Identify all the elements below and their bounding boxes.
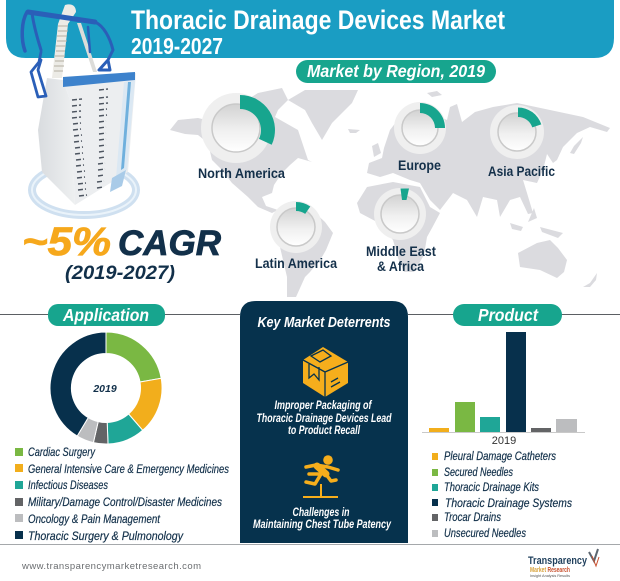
- pill: Product: Product: [478, 305, 539, 325]
- legend: product: [432, 449, 572, 540]
- text: improper packaging: [256, 400, 392, 437]
- pill: Application: Application: [62, 305, 149, 325]
- donut chart: application share: [50, 332, 162, 444]
- legend: product: Trocar Drains: [444, 510, 501, 524]
- legend: application: Oncology & Pain Management: [28, 512, 161, 526]
- label: North America: North America: [198, 166, 285, 181]
- logo: Transparency Market Research: Transparency: [528, 555, 588, 567]
- footer url: www.transparencymarketresearch.com: [21, 561, 201, 572]
- handle: [22, 12, 113, 97]
- legend: application: Military/Damage Control/Disaster Medicines: [28, 495, 222, 509]
- text: improper packaging: to Product Recall: [288, 425, 361, 437]
- legend: application: [15, 445, 229, 543]
- donut: Middle East & Africa: [374, 188, 426, 240]
- header banner: [6, 0, 614, 59]
- logo: Transparency Market Research: Insight Analysis Results: [530, 574, 570, 578]
- tube: [52, 4, 76, 78]
- logo: Transparency Market Research: Market Research: [530, 567, 570, 574]
- label: Middle East & Africa: & Africa: [377, 259, 424, 274]
- legend: product: Unsecured Needles: [444, 526, 526, 540]
- panel heading: Key Market Deterrents: [258, 315, 390, 331]
- logo: Transparency Market Research: [528, 549, 599, 578]
- pill: market by region: Market by Region, 2019: [307, 61, 485, 81]
- device illustration: drainage bag: [22, 4, 136, 215]
- CAGR callout: [22, 220, 222, 284]
- text: improper packaging: Improper Packaging of: [274, 400, 372, 412]
- label: Asia Pacific: Asia Pacific: [488, 164, 555, 179]
- donut: Latin America: [270, 201, 322, 253]
- text: improper packaging: Thoracic Drainage Devices Lead: [256, 413, 392, 425]
- text: challenges: Maintaining Chest Tube Patency: [253, 519, 391, 531]
- text: challenges: [253, 507, 391, 531]
- donut chart: application share: 2019: [92, 383, 117, 395]
- label: Europe: Europe: [398, 158, 441, 173]
- legend: application: General Intensive Care & Emergency Medicines: [28, 462, 229, 476]
- icon: package box: [303, 347, 348, 397]
- donut: Asia Pacific: [490, 105, 544, 159]
- label: Latin America: Latin America: [255, 256, 337, 271]
- icon: hurdle runner: [303, 455, 338, 497]
- bar chart: product: [422, 332, 585, 447]
- legend: application: Infectious Diseases: [28, 478, 108, 492]
- legend: product: Thoracic Drainage Systems: [445, 496, 572, 510]
- label: Middle East & Africa: Middle East: [366, 244, 436, 259]
- legend: application: Thoracic Surgery & Pulmonology: [28, 529, 184, 543]
- donut: North America: [201, 93, 275, 163]
- title: Thoracic Drainage Devices Market: [131, 5, 505, 35]
- CAGR callout: ~5%: [22, 220, 111, 264]
- CAGR callout: (2019-2027): [65, 263, 175, 284]
- CAGR callout: CAGR: [118, 224, 222, 263]
- donut: Europe: [394, 102, 446, 154]
- legend: application: Cardiac Surgery: [28, 445, 96, 459]
- legend: product: Thoracic Drainage Kits: [444, 480, 539, 494]
- legend: product: Pleural Damage Catheters: [444, 449, 556, 463]
- label: Middle East & Africa: [366, 244, 436, 274]
- world map: [170, 88, 610, 297]
- legend: product: Secured Needles: [444, 465, 513, 479]
- bar chart: product: 2019: [492, 435, 516, 447]
- panel: key market deterrents: [240, 301, 408, 543]
- title: [131, 5, 505, 59]
- title: 2019-2027: [131, 33, 223, 59]
- pill: Product: [453, 304, 562, 326]
- graduation marks: [72, 89, 108, 196]
- text: challenges: Challenges in: [292, 507, 350, 519]
